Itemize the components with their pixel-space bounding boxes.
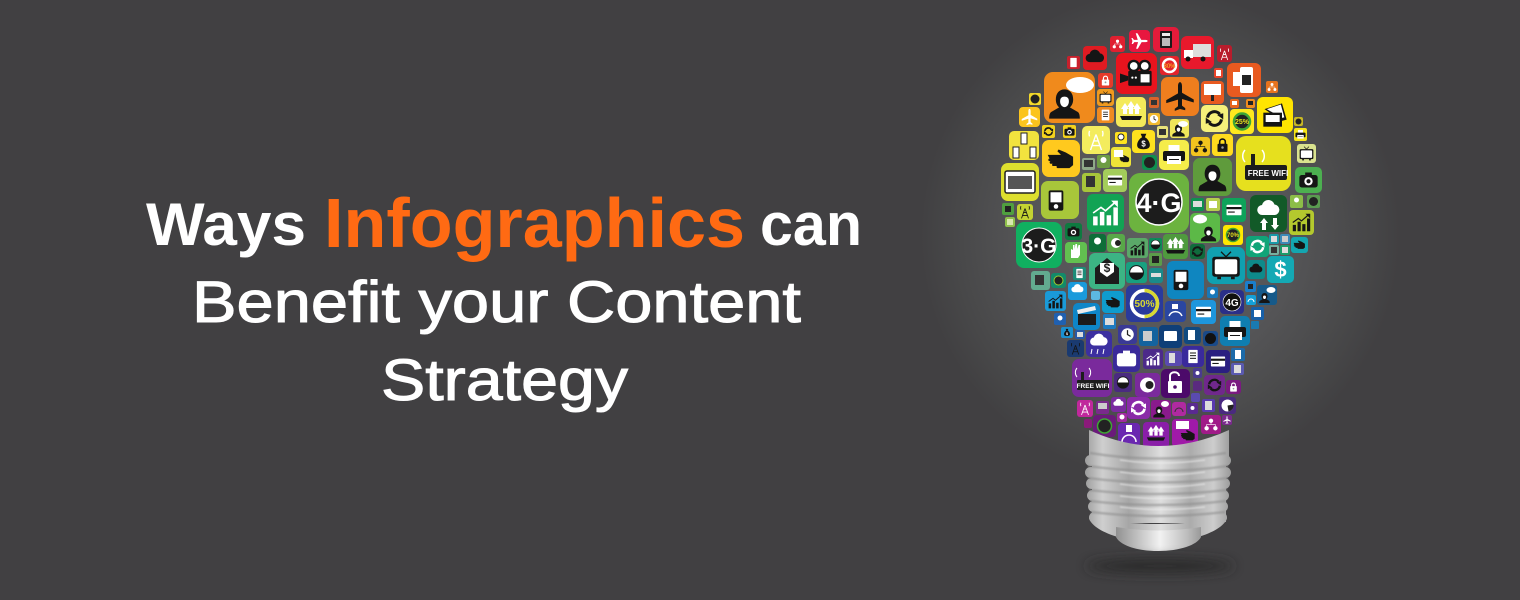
- icon: person with speech bubble: [1190, 213, 1220, 243]
- icon: free wifi router: FREE WIFI: [1248, 169, 1288, 178]
- title: [146, 184, 862, 413]
- red icon tiles: [1067, 27, 1232, 94]
- icon: credit card: [1191, 300, 1216, 324]
- icon: 4G small badge: [1220, 290, 1244, 314]
- icon: printer blue: [1220, 316, 1250, 346]
- title: can: [760, 191, 862, 258]
- red icon tiles: 30%: [1163, 64, 1176, 70]
- icon: music player: [1041, 181, 1079, 219]
- green icon tiles: [1002, 155, 1322, 268]
- icon: video camera: [1116, 53, 1157, 94]
- indigo and purple icon tiles: [1072, 331, 1245, 448]
- icon: printer: [1159, 140, 1189, 170]
- blue icon tiles: [1045, 281, 1277, 357]
- title: Infographics: [324, 184, 745, 262]
- icon: 3G badge: [1016, 222, 1062, 268]
- icon: headset operator: [1044, 72, 1095, 123]
- icon: music player blue: [1167, 261, 1204, 299]
- icon: payment terminal: [1227, 63, 1261, 97]
- icon: 3G badge: 3·G: [1021, 235, 1057, 258]
- icon: 4G small badge: 4G: [1225, 298, 1239, 309]
- title: Strategy: [381, 348, 628, 413]
- icon: camera indigo: [1113, 345, 1140, 372]
- icon: 50 percent: 50%: [1134, 299, 1155, 310]
- icon: calendar: [1001, 163, 1039, 201]
- icon: rain cloud light blue: [1068, 282, 1087, 300]
- icon: photographs: [1257, 97, 1293, 133]
- orange icon tiles: [1044, 63, 1278, 125]
- icon: padlock: [1212, 134, 1233, 156]
- icon: bar chart: [1087, 194, 1124, 232]
- icon: 4G badge: [1129, 173, 1189, 233]
- icon: free wifi router: [1236, 136, 1291, 191]
- icon: money bag: [1132, 130, 1155, 153]
- icon: 25 percent: [1230, 109, 1254, 134]
- screw thread ridges: [1085, 453, 1231, 523]
- yellow icon tiles: [1001, 93, 1316, 201]
- icon: phones: [1009, 131, 1039, 160]
- icon: rain cloud: [1086, 331, 1112, 357]
- icon: free wifi purple: [1072, 359, 1112, 397]
- icon: envelope with dollar: $: [1104, 261, 1111, 275]
- icon: refresh teal: [1246, 236, 1269, 257]
- icon: refresh arrows: [1201, 105, 1228, 132]
- icon: clapperboard: [1073, 303, 1100, 330]
- icon: 70 percent: 70%: [1227, 233, 1240, 239]
- icon: 4G badge: 4·G: [1136, 188, 1182, 218]
- icon: open padlock: [1161, 369, 1190, 398]
- bulb base tip: [1116, 527, 1201, 551]
- bulb metal screw base: [1085, 430, 1231, 551]
- icon: cloud with arrows: [1250, 195, 1287, 232]
- icon: dollar sign: [1267, 256, 1294, 283]
- icon: free wifi purple: FREE WIFI: [1077, 383, 1110, 390]
- light bulb made of icon tiles: [1001, 27, 1322, 448]
- title: Benefit your Content: [192, 270, 801, 335]
- icon: envelope with dollar: [1089, 253, 1125, 289]
- icon: hand: [1042, 140, 1080, 177]
- icon: 70 percent: [1223, 225, 1243, 245]
- icon: television: [1207, 247, 1245, 284]
- icon: airplane: [1161, 77, 1199, 116]
- background glow behind bulb: [920, 0, 1400, 480]
- teal icon tiles: [1031, 234, 1308, 299]
- icon: 25 percent: 25%: [1235, 119, 1250, 126]
- title: Ways: [146, 191, 306, 258]
- bulb ground shadow: [1086, 559, 1234, 573]
- icon: dollar sign: $: [1274, 257, 1287, 282]
- icon: 50 percent: [1126, 285, 1163, 322]
- icon: person in suit: [1193, 158, 1232, 196]
- icon: clock: [1118, 325, 1137, 344]
